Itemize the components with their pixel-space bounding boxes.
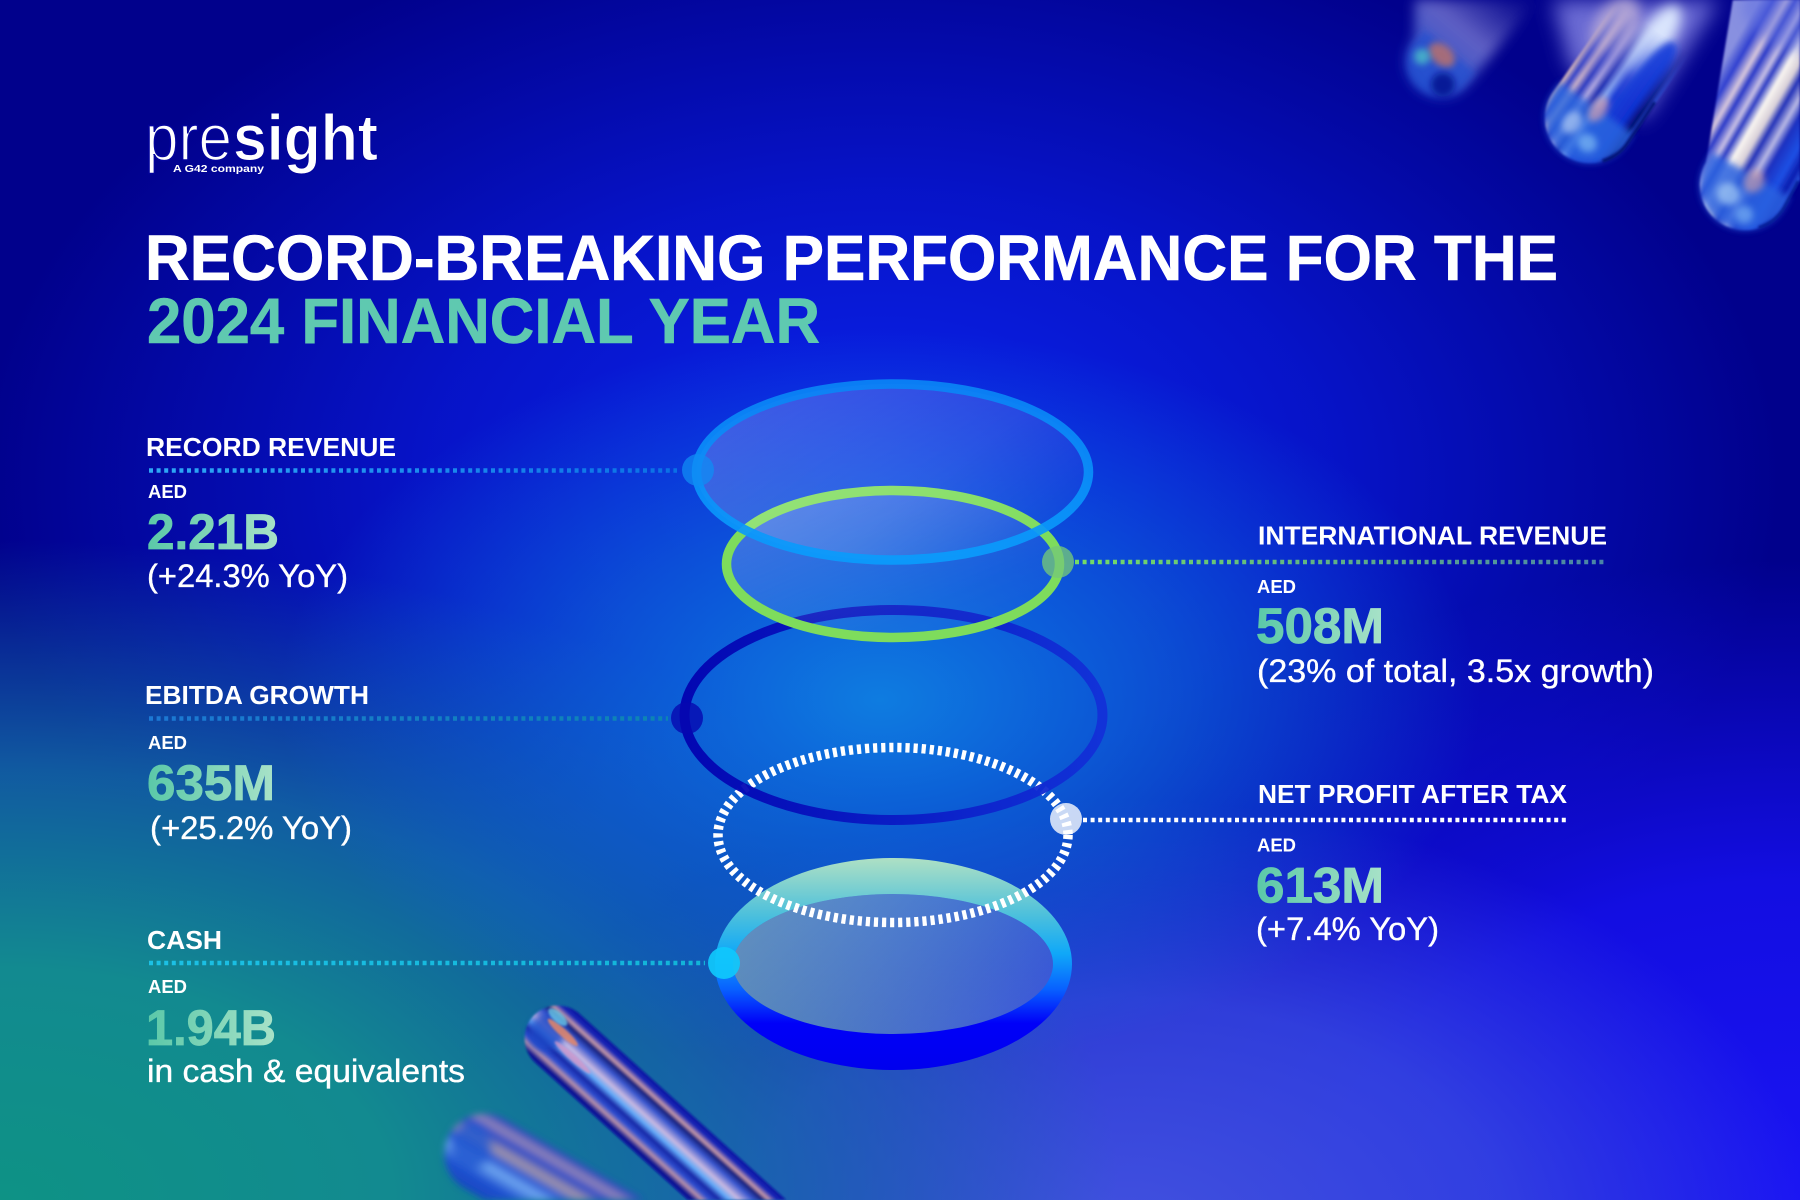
logo word: pre: pre (145, 101, 232, 174)
stacked rings (671, 384, 1102, 1070)
marker: ebitda (671, 702, 703, 734)
leader line (149, 961, 705, 965)
heading: CASH (147, 925, 222, 955)
description: (23% of total, 3.5x growth) (1257, 653, 1654, 689)
currency: AED (1257, 577, 1296, 597)
ring: net profit (718, 748, 1068, 922)
title (145, 222, 1558, 357)
panel: net profit after tax (1083, 779, 1568, 947)
decorative glass finger: top middle (1541, 0, 1726, 167)
change: (+24.3% YoY) (147, 558, 348, 594)
heading: INTERNATIONAL REVENUE (1258, 520, 1607, 550)
ring: cash (715, 858, 1072, 1070)
ring: record revenue (696, 384, 1088, 560)
change: (+7.4% YoY) (1256, 911, 1439, 947)
title line 1: RECORD-BREAKING PERFORMANCE FOR THE (145, 222, 1558, 294)
value: 613M (1256, 858, 1384, 914)
heading: EBITDA GROWTH (145, 680, 369, 710)
decorative glass finger: top left (1373, 0, 1538, 111)
change: (+25.2% YoY) (150, 810, 352, 846)
marker: cash (708, 947, 740, 979)
value: 508M (1256, 598, 1384, 654)
marker: international revenue (1042, 546, 1074, 578)
panel: cash (146, 925, 705, 1089)
leader line (149, 716, 668, 721)
marker: record revenue (682, 454, 714, 486)
currency: AED (148, 482, 187, 502)
panel: record revenue (146, 432, 677, 594)
heading: RECORD REVENUE (146, 432, 396, 462)
leader line (149, 468, 677, 473)
leader line (1083, 818, 1567, 822)
leader line (1075, 560, 1605, 564)
currency: AED (148, 733, 187, 753)
panel: ebitda growth (145, 680, 668, 846)
title line 2: 2024 FINANCIAL YEAR (147, 285, 820, 357)
logo word: sight: sight (233, 101, 378, 174)
ring: ebitda (684, 610, 1102, 820)
decorative glass finger: bottom sharp (520, 1003, 786, 1200)
heading: NET PROFIT AFTER TAX (1258, 779, 1568, 809)
logo (145, 101, 378, 175)
description: in cash & equivalents (147, 1053, 465, 1089)
marker: net profit (1050, 803, 1082, 835)
currency: AED (1257, 836, 1296, 856)
ring: international revenue (726, 490, 1060, 638)
value: 1.94B (146, 1000, 276, 1056)
decorative glass finger: top right (1633, 0, 1800, 246)
value: 635M (147, 755, 275, 811)
panel: international revenue (1075, 520, 1654, 689)
logo tagline: A G42 company (173, 163, 264, 175)
decorative glass finger: bottom blurred (444, 1114, 644, 1200)
currency: AED (148, 977, 187, 997)
value: 2.21B (147, 504, 279, 560)
